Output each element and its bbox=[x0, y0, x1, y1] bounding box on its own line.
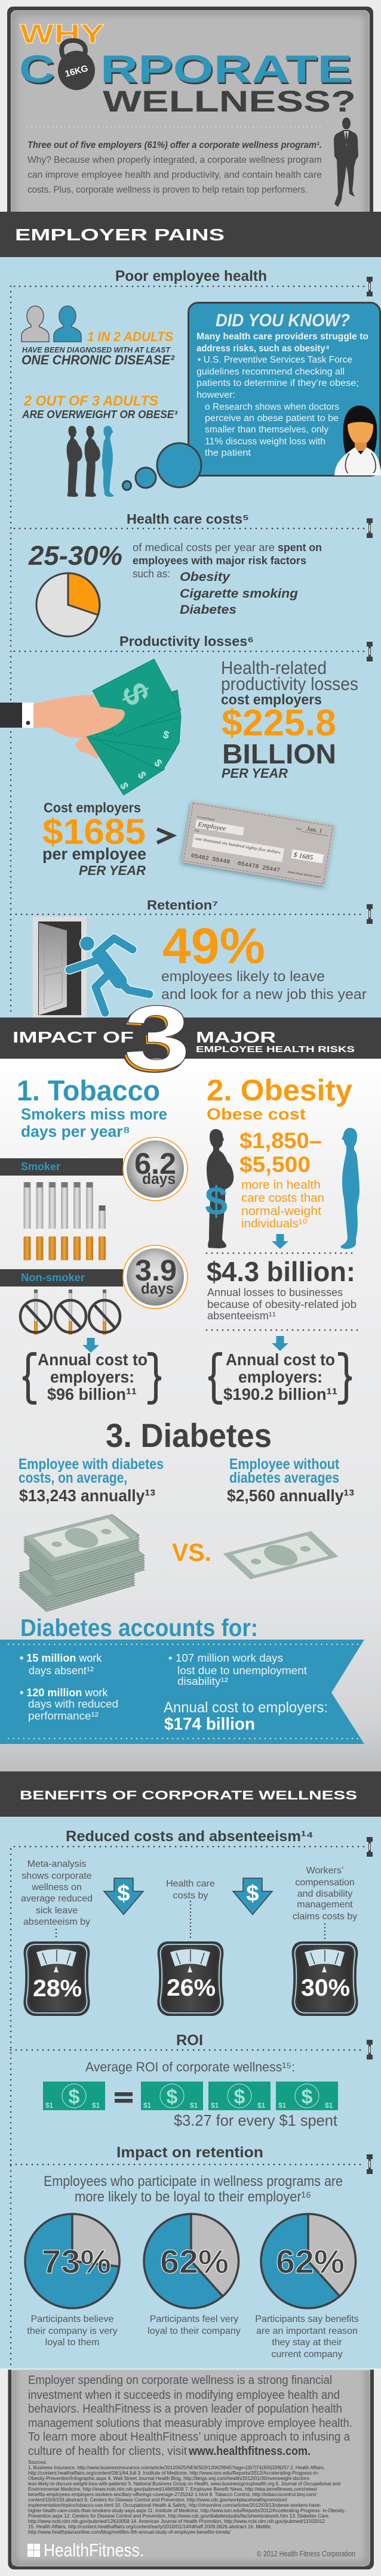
heading: reduced costs and absenteeism: Reduced costs and absenteeism¹⁴ bbox=[66, 1828, 314, 1845]
section band: impact of 3 major risks: MAJOR bbox=[196, 1028, 276, 1046]
heading: roi: ROI bbox=[176, 2032, 203, 2049]
caption: company loyal: loyal to them bbox=[45, 2337, 99, 2348]
text: cost without diabetes: diabetes averages bbox=[229, 1470, 339, 1486]
label: smoker bbox=[0, 1158, 123, 1176]
callout: tobacco annual cost bbox=[23, 1350, 161, 1403]
text: sick leave absenteeism: Meta-analysis bbox=[27, 1859, 86, 1869]
title: corporate shadow: C bbox=[20, 49, 56, 92]
stat: obese cost range: $1,850– bbox=[239, 1128, 322, 1153]
text: cost with diabetes bbox=[19, 1456, 164, 1505]
text: disability days bbox=[168, 1652, 307, 1687]
section band: benefits bbox=[0, 1771, 381, 1817]
heading: productivity losses bbox=[14, 633, 373, 661]
stat: 1 in 2 adults: HAVE BEEN DIAGNOSED WITH AT LEAST bbox=[22, 345, 171, 354]
subheading: smokers miss more days: Smokers miss more bbox=[21, 1105, 167, 1123]
panel: diabetes bbox=[0, 1417, 364, 1744]
callout: obesity annual cost: $190.2 billion¹¹ bbox=[223, 1385, 337, 1403]
stat: 4.3 billion: absenteeism¹¹ bbox=[207, 1310, 276, 1322]
stat: 49 percent: employees likely to leave bbox=[161, 969, 325, 985]
heading: reduced costs and absenteeism bbox=[14, 1828, 373, 1857]
title: corporate shadow bbox=[20, 49, 354, 92]
stat: 25-30 percent: 25-30% bbox=[28, 540, 122, 571]
callout: did you know: the patient bbox=[205, 448, 251, 458]
icon: three silhouettes bbox=[67, 426, 113, 497]
intro text bbox=[27, 140, 322, 195]
intro text: Why? Because when properly integrated, a corporate wellness program bbox=[27, 155, 322, 165]
section band: impact of 3 major risks: 3 bbox=[121, 989, 188, 1091]
stat: cost per employee bbox=[42, 800, 146, 878]
icon: hand with cash: $ bbox=[118, 781, 131, 791]
graphic: three dollar bills: $1 bbox=[278, 2101, 287, 2110]
icon: scale 26 percent: 26% bbox=[167, 1975, 216, 2001]
caption: feel loyal bbox=[148, 2314, 241, 2336]
title: corporate: RPORATE bbox=[100, 47, 352, 91]
text: cost without diabetes: Employee without bbox=[229, 1456, 340, 1473]
stat: obese cost range: normal-weight bbox=[241, 1205, 321, 1218]
icon: hand with cash bbox=[0, 659, 181, 795]
icon: 6.2 days disc: 6.2 bbox=[134, 1147, 176, 1180]
heading: productivity losses: Productivity losses⁶ bbox=[119, 633, 254, 649]
text: workers compensation: claims costs by bbox=[293, 1912, 357, 1922]
text: sources: Sources: bbox=[28, 2460, 47, 2465]
text: workers compensation: Workers’ bbox=[306, 1866, 343, 1876]
section band: impact of 3 major risks: 3 bbox=[124, 987, 190, 1088]
icon: 3.9 days disc bbox=[123, 1245, 188, 1309]
graphic: one dollar bill bbox=[43, 2082, 105, 2110]
text: cost with diabetes: $13,243 annually¹³ bbox=[19, 1486, 155, 1505]
icon: check bbox=[182, 801, 335, 886]
text: average roi: Average ROI of corporate wellness¹⁵: bbox=[85, 2059, 295, 2074]
text: sick leave absenteeism: wellness on bbox=[31, 1882, 82, 1892]
stat: diabetes annual cost: $174 billion bbox=[164, 1715, 255, 1734]
text: health care costs: Health care bbox=[166, 1879, 215, 1889]
text: sources: http://www.ncbi.nlm.nih.gov/pubmed/12610059 14. American Journal of Health Promotion, http://www.ncbi.nlm.nih.gov/pubmed/11502012 bbox=[28, 2519, 325, 2524]
text: disability days: lost due to unemployment bbox=[177, 1665, 307, 1677]
text: work days absent bbox=[20, 1652, 118, 1722]
icon: 3.9 days disc: 3.9 bbox=[135, 1254, 177, 1287]
panel: impact background bbox=[0, 1059, 381, 1771]
callout: obesity annual cost: employers: bbox=[238, 1368, 322, 1386]
title: corporate bbox=[19, 47, 352, 91]
chart: pie 73 percent bbox=[25, 2214, 119, 2308]
caption: feel loyal: Participants feel very bbox=[150, 2314, 238, 2324]
text: sources: content/10/3/233.abstract 9. Centers for Disease Control and Prevention, http://www.cdc.gov/workplacehealthpromotion/ bbox=[28, 2497, 288, 2503]
text: health care costs bbox=[166, 1879, 215, 1901]
text: workers compensation: management bbox=[297, 1900, 353, 1910]
text: sources: less-likely-to-discuss-weight-loss-with-patients/ 5. National Business Group on Health, www.businessgrouphealth.org 6. Journal of Occupational and bbox=[28, 2481, 340, 2487]
text: closing paragraph: behaviors. HealthFitness is a proven leader of population health bbox=[28, 2402, 342, 2416]
section band: impact of 3 major risks: EMPLOYEE HEALTH RISKS bbox=[196, 1044, 355, 1054]
text: sources: http://content.healthaffairs.org/content/28/1/64.full 3. Institute of Medicine, http://www.iom.edu/Reports/2012/Accelerating-Progress-in- bbox=[28, 2470, 319, 2476]
icon: check: 05482 55448 bbox=[190, 853, 231, 866]
icon: kettlebell bbox=[58, 41, 95, 90]
icon: no-smoking signs bbox=[20, 1289, 120, 1335]
stat: productivity losses $225.8 billion: Health-related bbox=[221, 657, 327, 678]
graphic: three dollar bills bbox=[141, 2082, 338, 2110]
text: sources: benefits-employees-employers-workers-ancillary-offerings-coverage-2725242-1.html 8. Tobacco Control, http://tobaccocontrol.bmj.com/ bbox=[28, 2492, 317, 2497]
callout: did you know: patients to determine if they’re obese; bbox=[196, 378, 359, 388]
stat: 4.3 billion bbox=[207, 1256, 357, 1322]
text: sick leave absenteeism: absenteeism by bbox=[23, 1917, 90, 1927]
callout: obesity annual cost bbox=[208, 1350, 352, 1403]
heading: diabetes accounts for: Diabetes accounts for: bbox=[20, 1614, 258, 1641]
stat: productivity losses $225.8 billion: productivity losses bbox=[221, 673, 358, 694]
graphic: three dollar bills: $ bbox=[167, 2086, 178, 2108]
subheading: smokers miss more days: days per year⁸ bbox=[21, 1122, 130, 1140]
stat: obese cost range: more in health bbox=[241, 1179, 321, 1192]
callout: did you know: Many health care providers struggle to bbox=[196, 332, 368, 342]
stat: cost per employee: per employee bbox=[42, 845, 146, 863]
text: medical costs: Cigarette smoking bbox=[180, 587, 298, 601]
text: sources bbox=[28, 2460, 346, 2535]
text: cost without diabetes bbox=[227, 1456, 354, 1505]
icon: kettlebell: 16KG bbox=[64, 63, 89, 79]
callout: did you know: address risks, such as obesity⁴ bbox=[196, 344, 330, 354]
stat: obese cost range bbox=[239, 1128, 324, 1230]
stat: cost per employee: Cost employers bbox=[44, 800, 141, 815]
caption: benefits reason: current company bbox=[271, 2349, 343, 2359]
heading: obesity: 2. Obesity bbox=[207, 1074, 352, 1107]
ribbon: diabetes facts bbox=[0, 1640, 364, 1744]
stat: productivity losses $225.8 billion: PER YEAR bbox=[222, 766, 288, 781]
callout: obesity annual cost: Annual cost to bbox=[226, 1350, 335, 1369]
text: closing paragraph bbox=[28, 2374, 352, 2458]
text: sources: 1. Business Insurance, http://www.businessinsurance.com/article/20120625/NEWS03/120629945?tags=|307|74|305|339|257 2. Health Affairs, bbox=[28, 2465, 325, 2470]
label: smoker: Smoker bbox=[21, 1161, 60, 1173]
arrow: down to tobacco cost bbox=[82, 1338, 99, 1353]
heading: health care costs: Health care costs⁵ bbox=[127, 511, 249, 527]
icon: obese silhouette with dollar bbox=[205, 1129, 233, 1248]
stat: obese cost range: care costs than bbox=[241, 1192, 324, 1205]
icon: equals bbox=[115, 2092, 133, 2103]
callout: did you know: smaller than themselves, only bbox=[205, 425, 328, 435]
text: work days absent: performance¹² bbox=[28, 1710, 99, 1722]
subheading: smokers miss more days bbox=[21, 1105, 167, 1140]
text: sick leave absenteeism: average reduced bbox=[21, 1894, 93, 1904]
callout: did you know: however: bbox=[196, 390, 235, 400]
panel: tobacco bbox=[0, 1075, 188, 1403]
text: medical costs bbox=[133, 542, 322, 617]
arrow: down to absenteeism losses bbox=[272, 1234, 288, 1249]
icon: single bill bbox=[223, 1531, 338, 1579]
text: closing paragraph: management solutions that measurably improve employee health. bbox=[28, 2417, 352, 2430]
text: closing paragraph: Employer spending on corporate wellness is a strong financial bbox=[28, 2374, 332, 2387]
icon: businessman silhouette bbox=[334, 117, 358, 207]
chart: pie 73 percent: 73% bbox=[42, 2243, 111, 2280]
icon: check: Jan. 1 bbox=[306, 825, 322, 835]
graphic: three dollar bills: $1 bbox=[257, 2101, 266, 2110]
title: corporate shadow: RPORATE bbox=[102, 49, 354, 92]
icon: scale 28 percent: 28% bbox=[33, 1975, 82, 2002]
graphic: three dollar bills: $1 bbox=[325, 2101, 333, 2110]
graphic: one dollar bill: $ bbox=[69, 2086, 80, 2108]
panel: header bbox=[7, 7, 373, 212]
icon: hand with cash: $ bbox=[162, 728, 170, 741]
text: participate in wellness: more likely to be loyal to their employer¹⁶ bbox=[75, 2189, 311, 2205]
icon: check: 654478 25447 bbox=[237, 861, 281, 874]
graphic: three dollar bills: $ bbox=[234, 2086, 245, 2108]
text: workers compensation: compensation bbox=[295, 1878, 355, 1888]
stat: cost per employee: PER YEAR bbox=[79, 863, 146, 878]
chart: pie 62 percent loyal: 62% bbox=[160, 2243, 229, 2280]
callout: did you know: guidelines recommend checking all bbox=[196, 367, 345, 377]
icon: scale 26 percent bbox=[157, 1941, 224, 2016]
icon: hand with cash: $ bbox=[152, 757, 165, 769]
text: work days absent: days absent¹² bbox=[29, 1665, 94, 1677]
section band: impact of 3 major risks bbox=[0, 987, 381, 1091]
icon: down arrow with dollar left bbox=[104, 1878, 143, 1915]
callout: did you know: 11% discuss weight loss with bbox=[205, 437, 325, 447]
stat: productivity losses $225.8 billion: cost employers bbox=[221, 692, 322, 708]
caption: benefits reason: are an important reason bbox=[256, 2326, 358, 2336]
icon: normal-weight silhouette bbox=[340, 1128, 360, 1249]
text: participate in wellness bbox=[44, 2173, 343, 2205]
stat: 49 percent bbox=[161, 918, 367, 1003]
heading: retention: Retention⁷ bbox=[147, 898, 218, 913]
text: work days absent: • 120 million work bbox=[20, 1687, 108, 1699]
graphic: one dollar bill: $1 bbox=[45, 2101, 54, 2110]
text: work days absent: days with reduced bbox=[28, 1698, 118, 1710]
caption: benefits reason: they stay at their bbox=[272, 2337, 342, 2348]
icon: scale 28 percent bbox=[23, 1941, 90, 2016]
stat: 4.3 billion: $4.3 billion: bbox=[207, 1256, 355, 1287]
callout: did you know: perceive an obese patient to be bbox=[205, 413, 339, 423]
heading: impact on retention bbox=[11, 2144, 373, 2174]
icon: door bbox=[33, 917, 87, 1018]
stat: obese cost range: individuals¹⁰ bbox=[241, 1217, 308, 1230]
stat: 1 in 2 adults: 1 IN 2 ADULTS bbox=[87, 329, 173, 344]
text: medical costs: Obesity bbox=[180, 570, 231, 584]
icon: greater than bbox=[157, 829, 173, 843]
icon: 6.2 days disc bbox=[123, 1137, 188, 1201]
text: sources: higher-health-care-costs-than-smokers-study-says.aspx 11. Institute of Medicine, http://www.iom.edu/Reports/2012/Accelerating-Progress- in-Obesity- bbox=[28, 2508, 346, 2513]
heading: retention bbox=[11, 898, 373, 924]
section band: benefits: BENEFITS OF CORPORATE WELLNESS bbox=[20, 1789, 357, 1802]
icon: check: Pay bbox=[195, 829, 200, 833]
panel: benefits background bbox=[0, 1817, 381, 2368]
subheading: obese cost: Obese cost bbox=[207, 1105, 306, 1123]
icon: scale 30 percent: 30% bbox=[301, 1975, 350, 2001]
text: participate in wellness: Employees who participate in wellness programs are bbox=[44, 2173, 343, 2190]
section band: employer pains bbox=[0, 212, 381, 257]
text: roi value: $3.27 for every $1 spent bbox=[174, 2111, 338, 2129]
callout: did you know: DID YOU KNOW? bbox=[216, 311, 350, 330]
stat: 1 in 2 adults: ONE CHRONIC DISEASE² bbox=[21, 352, 175, 367]
icon: 6.2 days disc: days bbox=[142, 1170, 176, 1188]
icon: 3.9 days disc: days bbox=[141, 1279, 174, 1297]
graphic: three dollar bills: $1 bbox=[211, 2101, 219, 2110]
text: closing paragraph: investment when it succeeds in modifying employee health and bbox=[28, 2389, 340, 2402]
title: corporate: C bbox=[19, 47, 55, 91]
icon: check: Employee bbox=[197, 820, 227, 833]
text: cost with diabetes: Employee with diabetes bbox=[19, 1456, 164, 1473]
graphic: one dollar bill: $1 bbox=[92, 2101, 100, 2110]
icon: stack of money bbox=[19, 1514, 145, 1612]
icon: check: 05482 55448 654478 25447 bbox=[287, 870, 321, 879]
stat: 4.3 billion: because of obesity-related job bbox=[207, 1298, 357, 1310]
caption: feel loyal: loyal to their company bbox=[148, 2326, 241, 2336]
label: non-smoker: Non-smoker bbox=[21, 1272, 85, 1284]
label: non-smoker bbox=[0, 1269, 123, 1287]
stat: 2 out of 3 adults: ARE OVERWEIGHT OR OBESE³ bbox=[21, 409, 178, 420]
text: medical costs: such as: bbox=[133, 568, 170, 580]
heading: roi bbox=[11, 2032, 373, 2059]
icon: doctor bbox=[334, 406, 381, 475]
icon: hand with cash: $ bbox=[114, 677, 157, 711]
logo: healthfitness: HealthFitness. bbox=[44, 2540, 144, 2560]
text: work days absent: • 15 million work bbox=[20, 1652, 102, 1664]
heading: diabetes: 3. Diabetes bbox=[106, 1417, 272, 1454]
heading: poor employee health bbox=[14, 268, 373, 296]
text: sources: Obesity-Prevention/Infographic.aspx 4. Wall Street Journal Health Blog, http://blogs.wsj.com/health/2012/01/30/overweight-doctors- bbox=[28, 2476, 311, 2481]
text: sick leave absenteeism bbox=[21, 1859, 93, 1927]
graphic: three dollar bills: $ bbox=[302, 2086, 313, 2108]
section band: impact of 3 major risks: IMPACT OF bbox=[13, 1028, 134, 1046]
stat: diabetes annual cost: Annual cost to employers: bbox=[164, 1699, 328, 1716]
graphic: three dollar bills: $1 bbox=[143, 2101, 152, 2110]
icon: scale 30 percent bbox=[291, 1941, 358, 2016]
stat: 2 out of 3 adults bbox=[21, 393, 178, 420]
icon: check: $ 1685 bbox=[293, 850, 314, 862]
text: closing paragraph: culture of health for clients, visit bbox=[28, 2445, 187, 2458]
text: health care costs: costs by bbox=[173, 1891, 208, 1901]
chart: pie 62 percent benefits bbox=[261, 2214, 355, 2308]
text: sources: Prevention.aspx 12. Centers for Disease Control and Prevention, http://www.cdc.gov/diabetes/pubs/factsheets/atwork.htm 13. Diabetes Care, bbox=[28, 2513, 330, 2519]
text: sources: implementation/topics/tobacco-use.html 10. Occupational Health & Safety, http://ohsonline.com/articles/2012/03/13/obese-workers-have- bbox=[28, 2503, 321, 2508]
stat: 49 percent: 49% bbox=[162, 918, 265, 974]
icon: down arrow with dollar right: $ bbox=[246, 1881, 259, 1906]
stat: 49 percent: and look for a new job this year bbox=[161, 987, 367, 1003]
caption: benefits reason bbox=[255, 2314, 359, 2359]
callout: tobacco annual cost: $96 billion¹¹ bbox=[47, 1385, 137, 1403]
stat: 4.3 billion: Annual losses to businesses bbox=[207, 1287, 343, 1298]
heading: tobacco: 1. Tobacco bbox=[17, 1075, 160, 1107]
stat: 2 out of 3 adults: 2 OUT OF 3 ADULTS bbox=[23, 393, 158, 409]
icon: two adults bbox=[21, 306, 81, 342]
stat: productivity losses $225.8 billion bbox=[221, 657, 358, 781]
callout: tobacco annual cost: Annual cost to bbox=[38, 1350, 148, 1369]
arrow: down to obesity cost bbox=[272, 1336, 288, 1351]
text: medical costs: of medical costs per year are bbox=[133, 542, 275, 553]
text: sources: http://www.healthplansonline.com/blog/metlifes-9th-annual-study-of-employee-benefits-trends/ bbox=[28, 2529, 231, 2535]
stat: cost per employee: $1685 bbox=[42, 812, 146, 852]
callout: did you know: o Research shows when doctors bbox=[205, 402, 339, 412]
intro text: can improve employee health and productivity, and contain health care bbox=[27, 170, 322, 180]
icon: down arrow with dollar right bbox=[233, 1878, 272, 1915]
icon: check: Date bbox=[296, 827, 302, 831]
text: copyright: © 2012 Health Fitness Corporation bbox=[257, 2549, 355, 2558]
caption: company loyal: Participants believe bbox=[31, 2314, 113, 2324]
heading: poor employee health: Poor employee health bbox=[115, 268, 267, 284]
icon: hand with cash: $ bbox=[136, 769, 149, 781]
panel: employer pains background bbox=[0, 257, 381, 1018]
chart: pie 25-30 percent bbox=[36, 573, 100, 636]
intro text: Three out of five employers (61%) offer a corporate wellness program¹. bbox=[27, 140, 322, 150]
icon: check: Account Payee bbox=[196, 815, 216, 821]
icon: person leaving bbox=[69, 936, 149, 1013]
text: disability days: • 107 million work days bbox=[168, 1652, 283, 1664]
text: cost without diabetes: $2,560 annually¹³ bbox=[227, 1486, 354, 1505]
caption: company loyal: their company is very bbox=[27, 2326, 118, 2336]
text: sources: Environmental Medicine, http://www.ncbi.nlm.nih.gov/pubmed/14665809 7. Employee Benefit News, http://eba.benefitnews.com/news/ bbox=[28, 2487, 318, 2492]
callout: tobacco annual cost: employers: bbox=[50, 1368, 134, 1386]
stat: productivity losses $225.8 billion: $225.8 bbox=[222, 703, 336, 744]
text: cost with diabetes: costs, on average, bbox=[19, 1470, 127, 1486]
text: workers compensation: and disability bbox=[297, 1889, 352, 1899]
text: sources: 15. Health Affairs, http://content.healthaffairs.org/content/early/2010/01/14/hlthaff.2009.0626.abstract 16. Metlife, bbox=[28, 2524, 272, 2529]
label: versus: VS. bbox=[172, 1538, 211, 1566]
title: wellness: WELLNESS? bbox=[103, 85, 356, 118]
graphic: three dollar bills: $1 bbox=[190, 2101, 198, 2110]
chart: pie 62 percent loyal bbox=[144, 2214, 238, 2308]
text: medical costs: employees with major risk factors bbox=[133, 555, 306, 567]
icon: check: one thousand six hundred eighty-five dollars bbox=[195, 836, 281, 855]
chart: pie 62 percent benefits: 62% bbox=[276, 2243, 345, 2280]
text: medical costs: spent on bbox=[278, 542, 322, 553]
text: disability days: disability¹² bbox=[177, 1675, 228, 1687]
caption: benefits reason: Participants say benefits bbox=[255, 2314, 359, 2324]
caption: company loyal bbox=[27, 2314, 118, 2348]
text: closing paragraph: www.healthfitness.com. bbox=[188, 2445, 311, 2458]
icon: obese silhouette with dollar: $ bbox=[205, 1179, 228, 1224]
stat: productivity losses $225.8 billion: BILLION bbox=[222, 738, 336, 769]
text: medical costs: Diabetes bbox=[180, 603, 236, 617]
callout: did you know: • U.S. Preventive Services Task Force bbox=[198, 355, 352, 365]
panel: obesity bbox=[205, 1074, 360, 1403]
text: sick leave absenteeism: sick leave bbox=[36, 1906, 78, 1916]
text: closing paragraph: To learn more about HealthFitness’ unique approach to infusing a bbox=[28, 2430, 351, 2444]
title: why: WHY bbox=[20, 18, 105, 49]
callout: did you know bbox=[189, 303, 380, 476]
heading: health care costs bbox=[14, 511, 373, 538]
text: sick leave absenteeism: shows corporate bbox=[21, 1871, 92, 1881]
intro text: costs. Plus, corporate wellness is proven to help retain top performers. bbox=[27, 185, 308, 195]
heading: impact on retention: Impact on retention bbox=[116, 2144, 263, 2161]
section band: employer pains: EMPLOYER PAINS bbox=[15, 225, 225, 244]
panel: closing bbox=[8, 2356, 374, 2569]
text: workers compensation bbox=[293, 1866, 357, 1922]
icon: thought bubbles bbox=[123, 443, 201, 490]
icon: down arrow with dollar left: $ bbox=[117, 1881, 130, 1906]
icon: seven cigarettes bbox=[24, 1182, 106, 1260]
stat: diabetes annual cost bbox=[164, 1699, 328, 1734]
stat: obese cost range: $5,500 bbox=[239, 1152, 311, 1177]
stat: 1 in 2 adults bbox=[21, 329, 175, 367]
